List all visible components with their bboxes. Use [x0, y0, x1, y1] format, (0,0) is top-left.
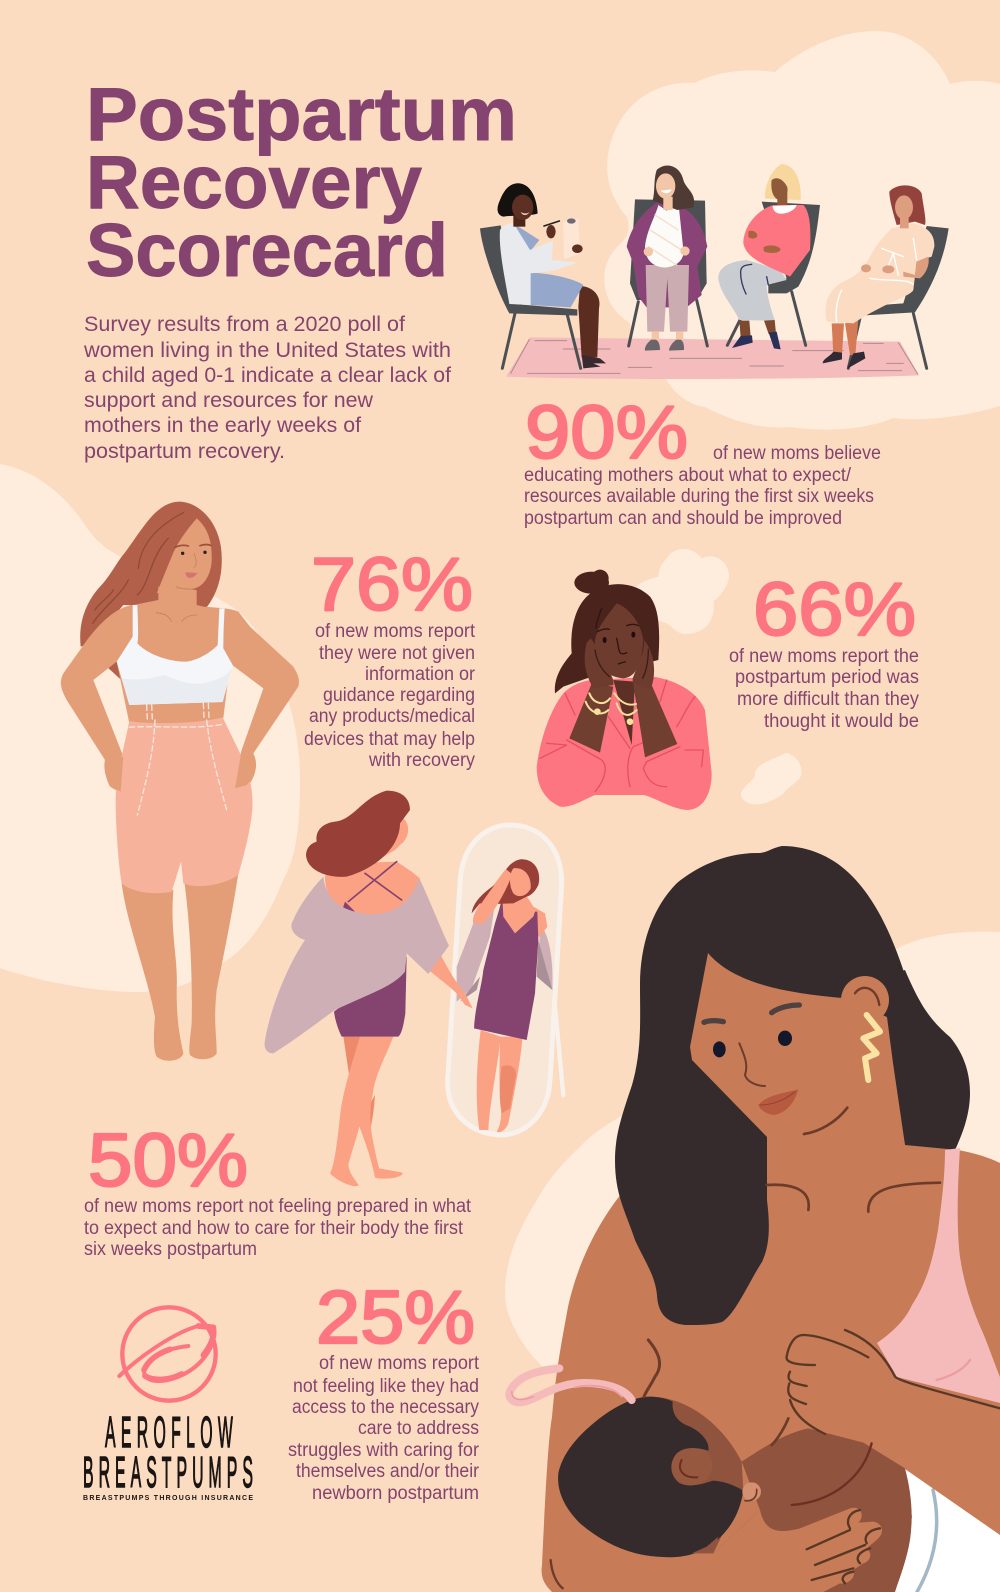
baby chin	[742, 1482, 761, 1501]
stat: 25 percent: not feeling like they had	[293, 1376, 479, 1397]
back of woman: hair	[306, 791, 410, 877]
illustration: woman resting face on hands with clouds	[537, 549, 802, 810]
illustration: woman in postpartum shapewear	[61, 502, 299, 1061]
torso and arms	[61, 587, 299, 792]
stat: 66 percent: of new moms report the	[729, 646, 919, 667]
stat: 50 percent: to expect and how to care for their body the first	[84, 1218, 464, 1239]
stat: 66 percent: thought it would be	[764, 711, 919, 732]
stat: 90 percent: educating mothers about what to expect/	[524, 465, 852, 486]
intro text: women living in the United States with	[83, 339, 451, 362]
background blob: top right cloud	[604, 31, 1000, 430]
baby head	[633, 1397, 743, 1553]
title: Postpartum	[86, 72, 517, 156]
baby hair	[558, 1397, 743, 1557]
chair and person: woman in coral sweater	[718, 164, 820, 349]
stat: 76 percent	[304, 542, 476, 771]
illustration: mother breastfeeding baby	[509, 846, 1000, 1592]
back of woman: back leg	[343, 1037, 375, 1145]
white towel	[880, 1440, 1000, 1592]
legs	[122, 873, 238, 1061]
body shadow and lines	[792, 1443, 872, 1505]
chair and person: therapist	[480, 183, 606, 368]
neck	[613, 680, 635, 745]
pink bra	[877, 1148, 1000, 1403]
stat: 25 percent: struggles with caring for	[288, 1440, 480, 1461]
small cloud upper	[637, 549, 729, 634]
stat: 66 percent: 66%	[753, 567, 916, 651]
stat: 76 percent: they were not given	[319, 643, 475, 664]
feeding tube	[509, 1368, 632, 1402]
stat: 50 percent	[84, 1118, 472, 1260]
face	[595, 603, 643, 678]
title: Recovery	[86, 140, 422, 224]
stat: 25 percent: access to the necessary	[292, 1397, 479, 1418]
stat: 50 percent: 50%	[88, 1118, 248, 1202]
mother fist	[787, 1330, 1000, 1434]
logo mark	[119, 1307, 216, 1401]
back of woman: front legs	[330, 1037, 403, 1186]
mother main hair	[615, 846, 905, 1325]
hands over skirt	[105, 750, 256, 792]
illustration: support group of four women on a rug	[480, 164, 949, 379]
title: Scorecard	[86, 208, 448, 292]
shirt	[537, 677, 712, 810]
shaper skirt	[116, 717, 253, 893]
stat: 66 percent	[729, 567, 919, 732]
intro text: Survey results from a 2020 poll of	[84, 313, 405, 336]
stat: 66 percent: more difficult than they	[737, 689, 919, 710]
baby body	[713, 1428, 912, 1592]
reflection chest	[493, 893, 547, 937]
stat: 90 percent: postpartum can and should be improved	[524, 508, 842, 529]
intro text: mothers in the early weeks of	[84, 414, 361, 437]
stat: 76 percent: with recovery	[368, 750, 475, 771]
forearms	[569, 683, 677, 757]
stat: 76 percent: 76%	[311, 542, 473, 626]
stat: 25 percent: newborn postpartum	[312, 1483, 479, 1504]
stat: 76 percent: information or	[365, 664, 476, 685]
illustration: woman looking in a standing mirror	[265, 791, 563, 1186]
mother back hair	[842, 970, 970, 1150]
fingers	[807, 1510, 880, 1583]
towel stripe	[917, 1490, 937, 1592]
back of woman: back skin and straps	[325, 862, 420, 920]
logo wordmark	[83, 1408, 253, 1498]
stat: 25 percent: 25%	[316, 1275, 475, 1359]
logo tagline: BREASTPUMPS THROUGH INSURANCE	[83, 1495, 253, 1502]
title	[86, 72, 517, 292]
stat: 50 percent: of new moms report not feeling prepared in what	[84, 1196, 472, 1217]
back of woman: dress	[334, 957, 407, 1037]
stat: 90 percent: resources available during the first six weeks	[524, 486, 874, 507]
stat: 76 percent: devices that may help	[304, 729, 475, 750]
mirror	[448, 825, 563, 1135]
back of woman: arm	[427, 953, 473, 1008]
mother lower hand over baby	[713, 1508, 882, 1592]
rug	[506, 337, 919, 379]
stat: 25 percent	[288, 1275, 480, 1504]
logo wordmark: BREASTPUMPS	[83, 1448, 253, 1498]
back of woman: shawl	[265, 877, 449, 1053]
reflection	[457, 859, 553, 1132]
hands	[585, 638, 654, 689]
background blob: lower right	[505, 932, 1000, 1400]
stat: 66 percent: postpartum period was	[735, 667, 919, 688]
baby, hand and tube	[509, 1330, 1000, 1592]
background blob: left	[0, 464, 300, 992]
intro text: a child aged 0-1 indicate a clear lack of	[84, 364, 451, 387]
chair and person: woman in cream dress	[823, 185, 949, 369]
intro text	[83, 313, 451, 463]
small cloud lower	[741, 753, 802, 804]
face	[157, 518, 212, 593]
stat: 76 percent: any products/medical	[309, 706, 475, 727]
mother body and face	[542, 953, 1000, 1592]
stat: 76 percent: guidance regarding	[323, 685, 475, 706]
logo wordmark: AEROFLOW	[105, 1408, 233, 1458]
stat: 25 percent: of new moms report	[319, 1353, 480, 1374]
stat: 90 percent: of new moms believe	[713, 443, 881, 464]
stat: 90 percent	[524, 390, 881, 529]
logo: Aeroflow Breastpumps	[83, 1307, 253, 1502]
chair and person: woman in purple cardigan	[627, 165, 707, 351]
stat: 90 percent: 90%	[525, 390, 688, 474]
stat: 50 percent: six weeks postpartum	[84, 1239, 257, 1260]
stat: 76 percent: of new moms report	[315, 621, 476, 642]
mother face details	[704, 976, 940, 1212]
stat: 25 percent: care to address	[358, 1418, 479, 1439]
stat: 25 percent: themselves and/or their	[296, 1461, 480, 1482]
bra	[117, 605, 233, 705]
necklaces and bracelets	[586, 693, 637, 715]
hair	[80, 502, 222, 679]
hair and bun	[574, 572, 609, 594]
intro text: support and resources for new	[84, 389, 374, 412]
intro text: postpartum recovery.	[84, 440, 285, 463]
